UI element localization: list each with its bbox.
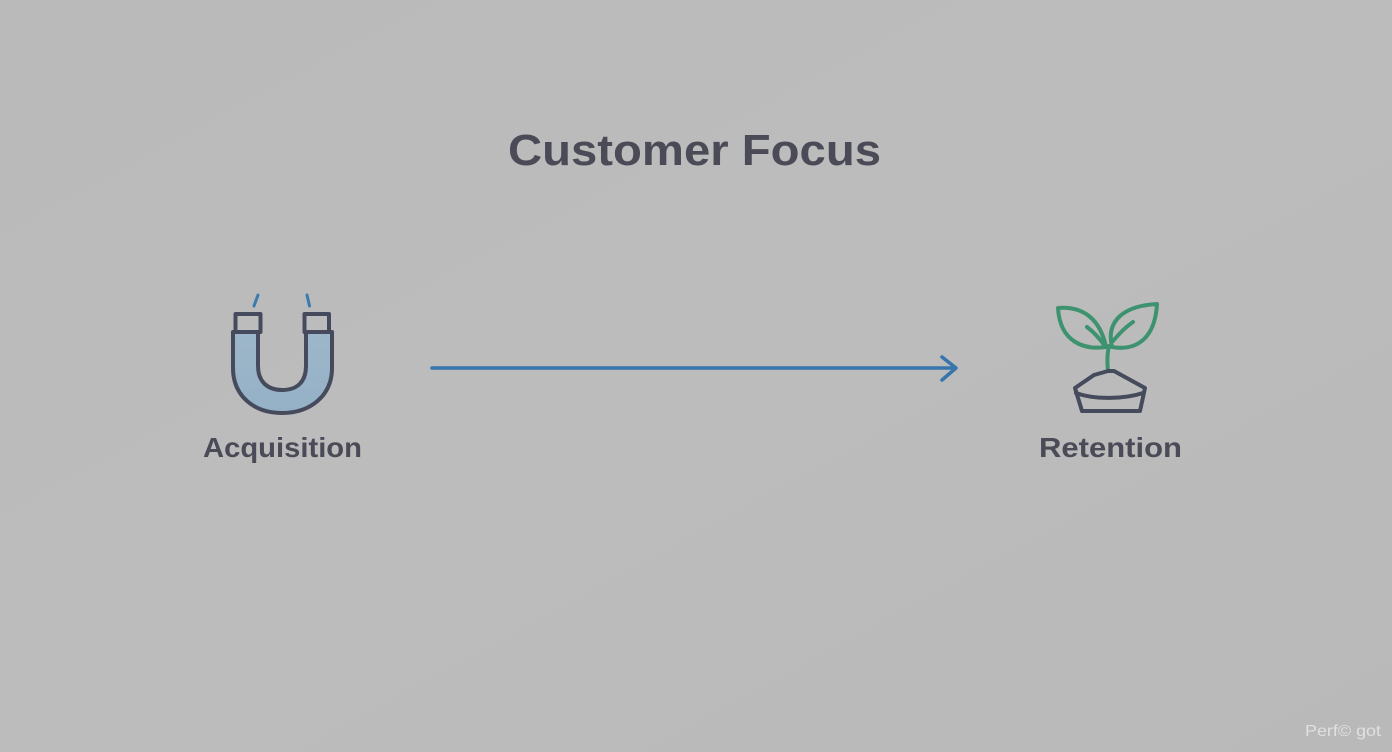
title: Customer Focus [508,126,881,175]
label: acquisition: Acquisition [203,432,362,463]
arrow [432,357,956,380]
watermark: Perf© got [1305,723,1382,740]
icon: sprout [1058,304,1157,411]
soil mound pot [1075,371,1145,411]
icon: magnet [233,295,332,413]
label: retention: Retention [1039,432,1182,463]
sprout stem and leaves [1058,304,1157,371]
